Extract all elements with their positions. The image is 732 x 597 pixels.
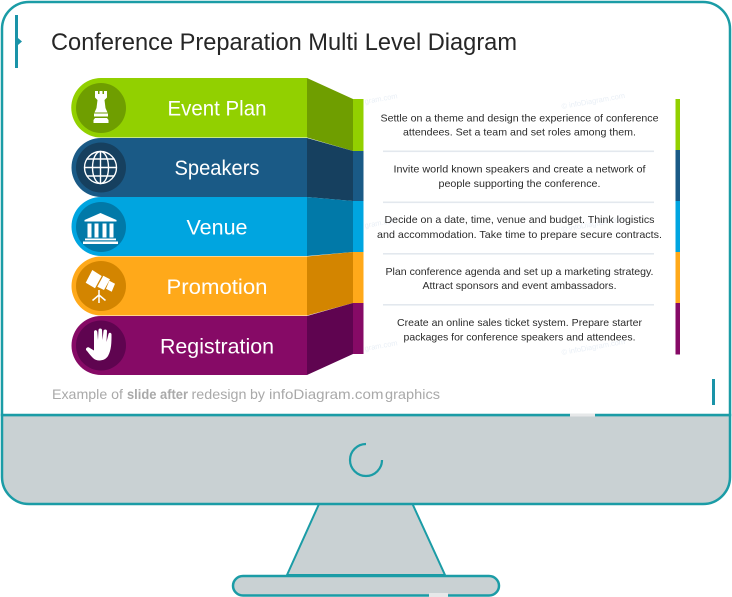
level: Registration — [72, 303, 364, 375]
footer caption — [52, 386, 440, 402]
level: Speakers: Speakers — [174, 156, 260, 180]
text: Registration description — [397, 317, 642, 344]
footer caption: graphics — [385, 386, 440, 402]
title accent marker — [15, 15, 22, 68]
text: Registration description: Create an online sales ticket system. Prepare starter — [397, 317, 642, 329]
right accent marker — [712, 379, 715, 405]
level: Promotion — [72, 252, 364, 316]
text: Venue description — [377, 214, 662, 241]
watermarks: © infoDiagram.com — [561, 337, 626, 357]
footer caption: slide after — [127, 386, 189, 402]
panel: descriptions — [377, 112, 662, 344]
watermarks: gram.com — [364, 215, 398, 230]
text: Registration description: packages for conference speakers and attendees. — [404, 332, 636, 344]
level: Venue — [72, 197, 364, 256]
text: Venue description: Decide on a date, time, venue and budget. Think logistics — [384, 214, 654, 226]
monitor stand — [287, 504, 445, 575]
footer caption: by — [250, 386, 265, 402]
level: Event Plan: Event Plan — [168, 96, 266, 120]
level: Venue: Venue — [186, 216, 248, 240]
footer caption: infoDiagram.com — [269, 386, 384, 402]
icon: classical building — [83, 213, 118, 244]
watermarks: gram.com — [364, 91, 398, 106]
title: Conference Preparation Multi Level Diagram — [51, 29, 517, 56]
footer caption: redesign — [192, 386, 246, 402]
level: Promotion: Promotion — [166, 275, 268, 299]
icon: globe — [84, 152, 116, 184]
monitor base — [233, 576, 499, 597]
text: Speakers description: Invite world known speakers and create a network of — [394, 164, 646, 176]
icon: telescope — [86, 270, 115, 303]
level: Speakers — [72, 138, 364, 201]
text: Event Plan description: Settle on a theme and design the experience of conference — [380, 112, 659, 124]
text: Venue description: and accommodation. Take time to prepare secure contracts. — [377, 229, 662, 241]
footer caption: Example of — [52, 386, 123, 402]
text: Event Plan description: attendees. Set a team and set roles among them. — [403, 126, 636, 138]
watermarks: gram.com — [364, 338, 398, 353]
watermarks: © infoDiagram.com — [561, 91, 626, 111]
text: Promotion description: Attract sponsors and event ambassadors. — [422, 280, 616, 292]
text: Speakers description: people supporting the conference. — [438, 178, 600, 190]
power button icon — [350, 444, 382, 476]
right colour strip — [676, 99, 680, 354]
watermarks: © infoDiagram.com — [561, 214, 626, 234]
icon: hand — [86, 328, 112, 360]
icon: chess rook — [94, 91, 108, 123]
text: Event Plan description — [380, 112, 659, 138]
text: Promotion description: Plan conference agenda and set up a marketing strategy. — [386, 266, 654, 278]
text: Speakers description — [394, 164, 646, 190]
level: Registration: Registration — [160, 334, 274, 358]
watermarks — [364, 91, 626, 357]
text: Promotion description — [386, 266, 654, 292]
level: Event Plan — [71, 78, 364, 151]
